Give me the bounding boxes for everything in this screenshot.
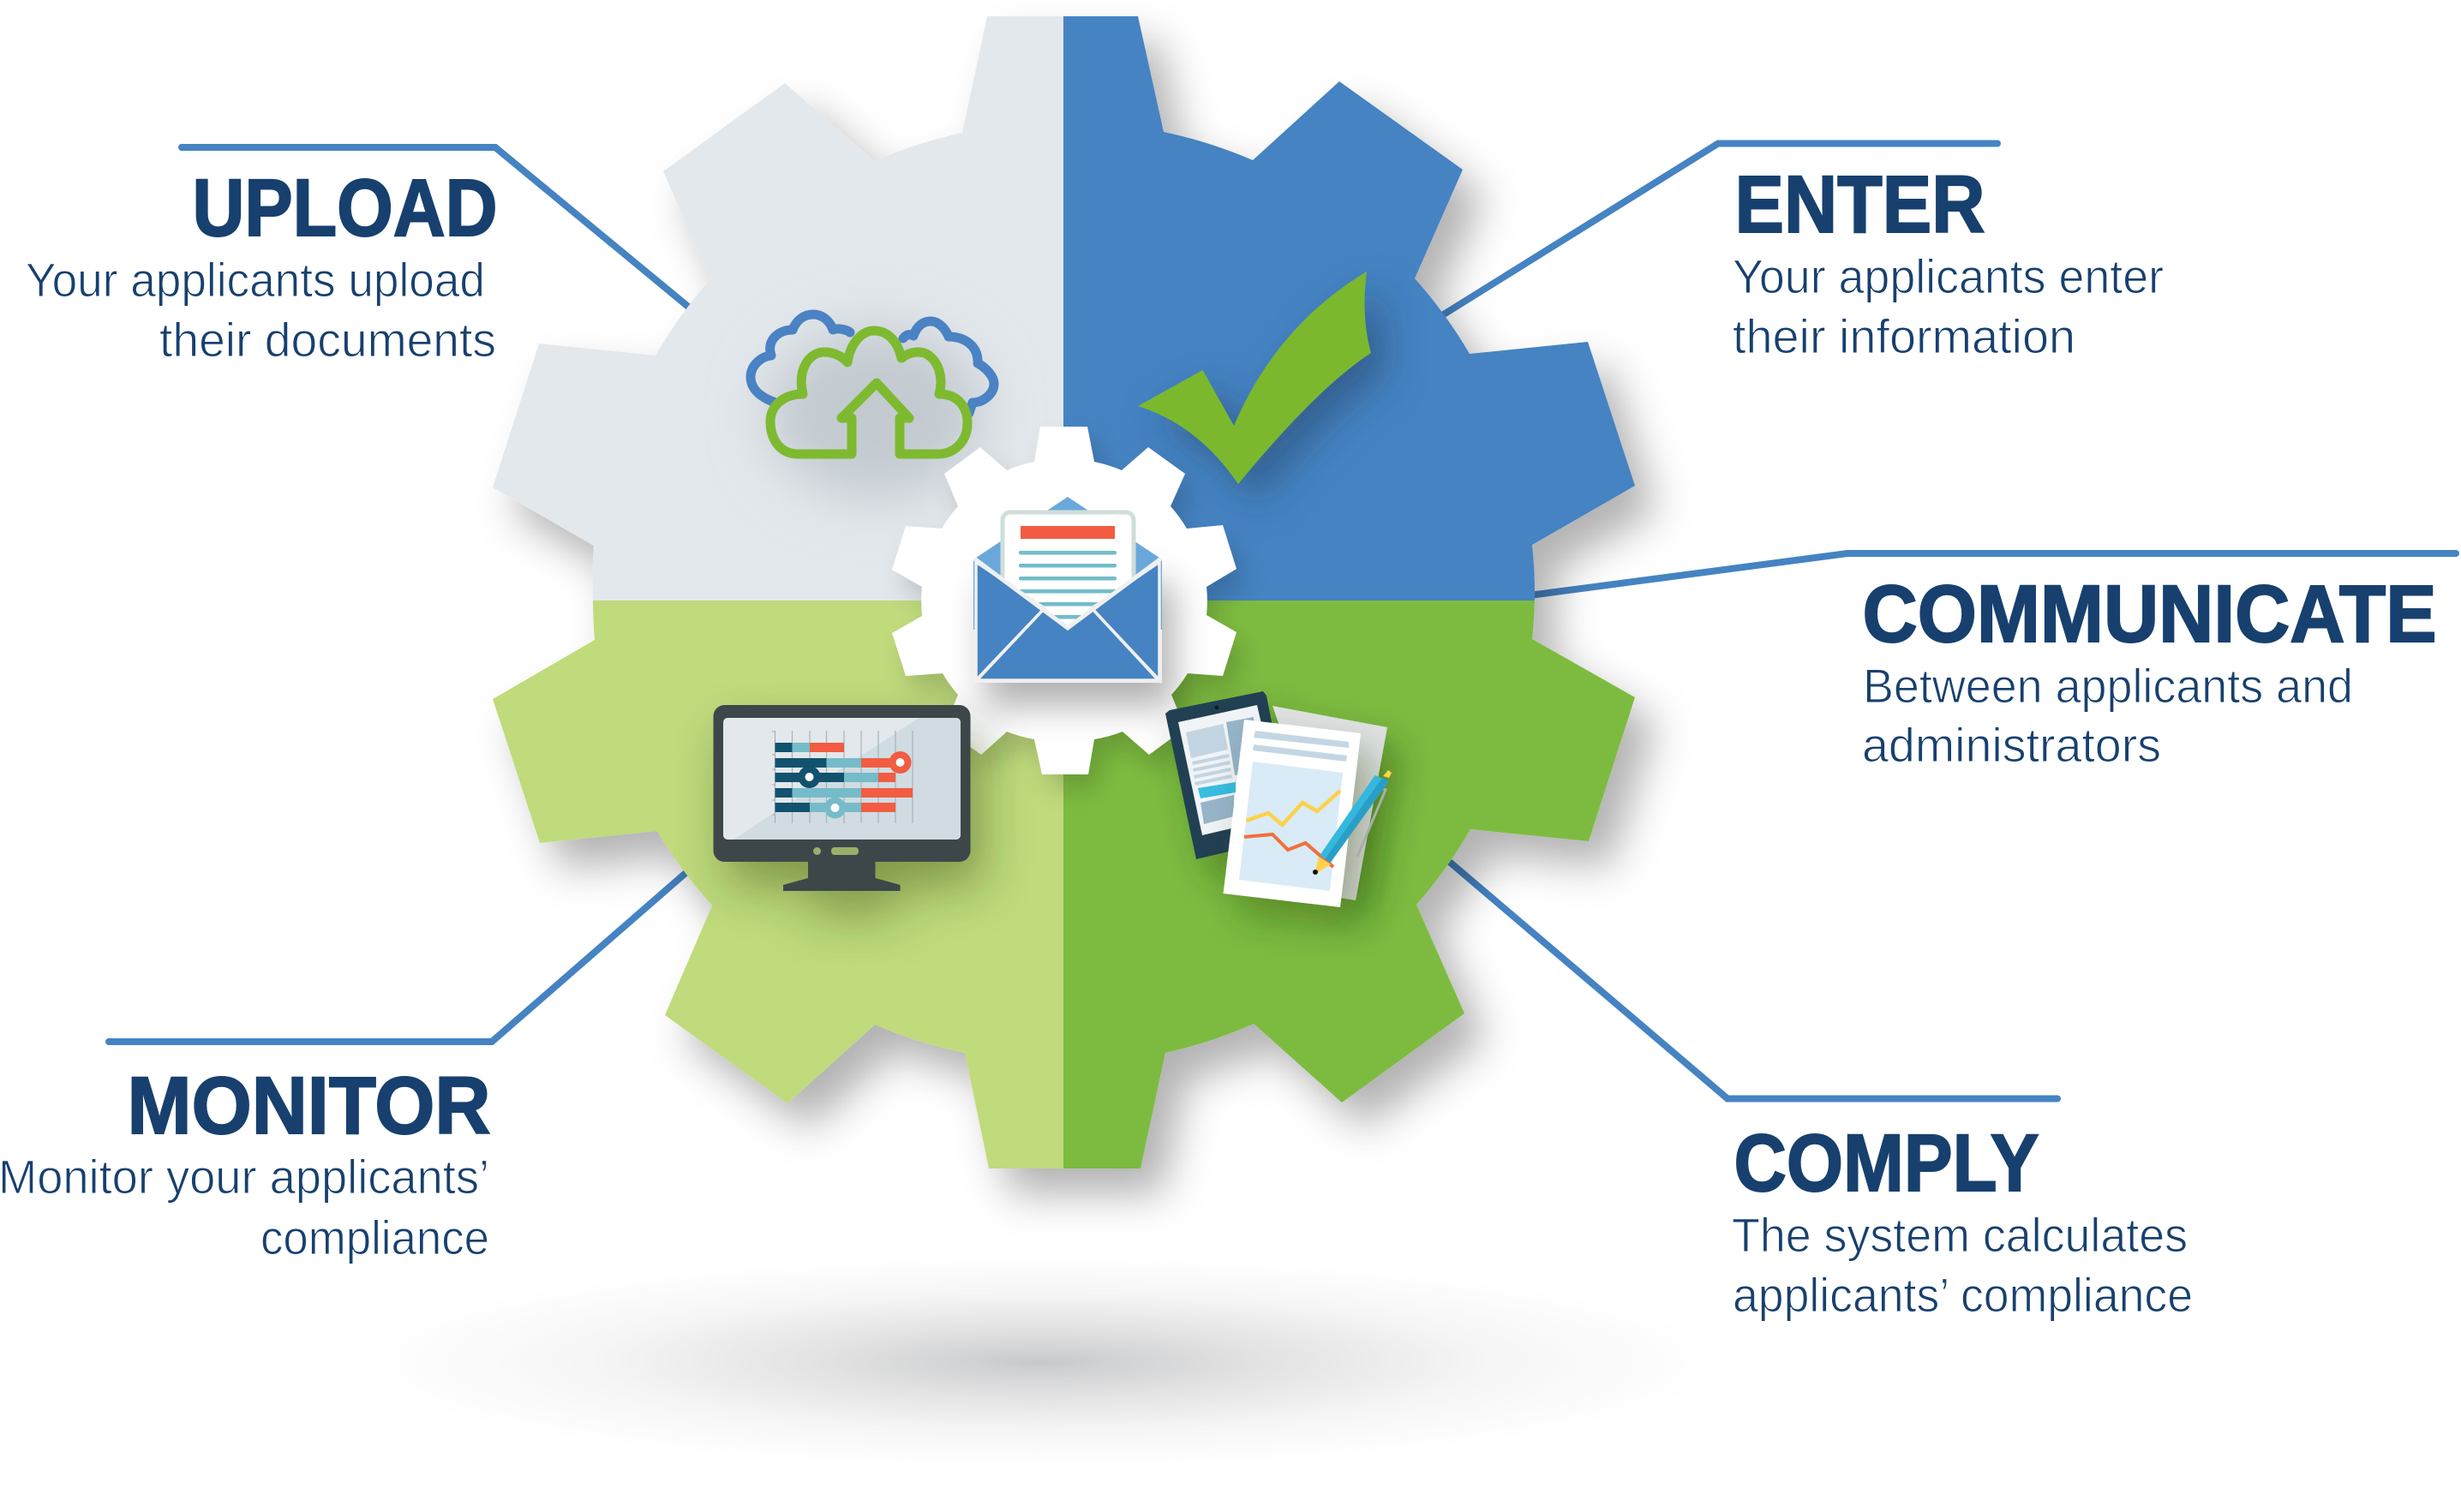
label: monitor — [0, 1061, 490, 1264]
description: upload — [26, 253, 496, 367]
connector line: communicate — [1530, 553, 2456, 595]
connector line: upload — [182, 147, 692, 310]
envelope front panels — [976, 562, 1159, 680]
pencil — [1313, 770, 1392, 875]
connector line: comply — [1446, 859, 2057, 1098]
large gear — [493, 16, 1635, 1168]
icon: upload clouds — [751, 314, 994, 499]
description: monitor: Monitor your applicants’ — [0, 1150, 489, 1204]
monitor screen — [723, 718, 961, 840]
tablet text lines — [1192, 754, 1232, 786]
icon: monitor — [713, 705, 970, 891]
heading: comply: COMPLY — [1734, 1118, 2039, 1209]
connector line: monitor — [109, 869, 691, 1042]
white paper — [1224, 720, 1361, 907]
ground shadow — [355, 1256, 1726, 1468]
heading: enter: ENTER — [1734, 159, 1985, 250]
description: comply: applicants’ compliance — [1733, 1268, 2193, 1322]
letter — [1003, 512, 1134, 628]
icon: documents and pencil — [1165, 691, 1392, 907]
description: communicate — [1862, 659, 2353, 772]
cloud shadow — [766, 327, 985, 499]
description: enter: Your applicants enter — [1733, 249, 2164, 303]
monitor stand and case — [713, 705, 970, 891]
envelope flap edge — [974, 559, 1161, 628]
gear quadrant: monitor — [493, 601, 1064, 1168]
blue back clouds — [751, 314, 994, 413]
gray back sheet — [1272, 706, 1387, 900]
description: communicate: Between applicants and — [1863, 659, 2353, 713]
icon: check mark — [1138, 272, 1371, 484]
description: upload: their documents — [159, 313, 496, 367]
heading: monitor: MONITOR — [127, 1061, 490, 1151]
envelope back flap — [973, 497, 1162, 630]
description: monitor: compliance — [260, 1210, 489, 1264]
tablet screen — [1178, 705, 1283, 835]
gantt chart — [772, 731, 913, 823]
description: upload: Your applicants upload — [26, 253, 485, 307]
tablet — [1165, 691, 1294, 859]
description: comply — [1732, 1208, 2193, 1322]
label: upload — [26, 163, 497, 367]
label: enter — [1733, 159, 2164, 363]
heading: upload: UPLOAD — [192, 163, 497, 254]
gear quadrant: enter — [1063, 16, 1635, 601]
line chart on paper — [1239, 762, 1343, 891]
gear quadrant: comply — [1063, 601, 1635, 1168]
gear quadrant: upload — [493, 16, 1064, 601]
green front cloud with arrow — [770, 331, 967, 454]
connector line: enter — [1440, 144, 1997, 317]
label: comply — [1732, 1118, 2193, 1322]
description: enter — [1733, 249, 2164, 363]
description: communicate: administrators — [1862, 718, 2161, 772]
monitor buttons — [813, 847, 821, 855]
description: enter: their information — [1733, 309, 2075, 363]
small white gear — [892, 427, 1236, 774]
envelope body — [973, 559, 1162, 683]
heading: communicate: COMMUNICATE — [1863, 569, 2437, 660]
description: monitor — [0, 1150, 489, 1264]
icon: envelope — [973, 497, 1162, 683]
label: communicate — [1862, 569, 2437, 772]
description: comply: The system calculates — [1732, 1208, 2188, 1262]
